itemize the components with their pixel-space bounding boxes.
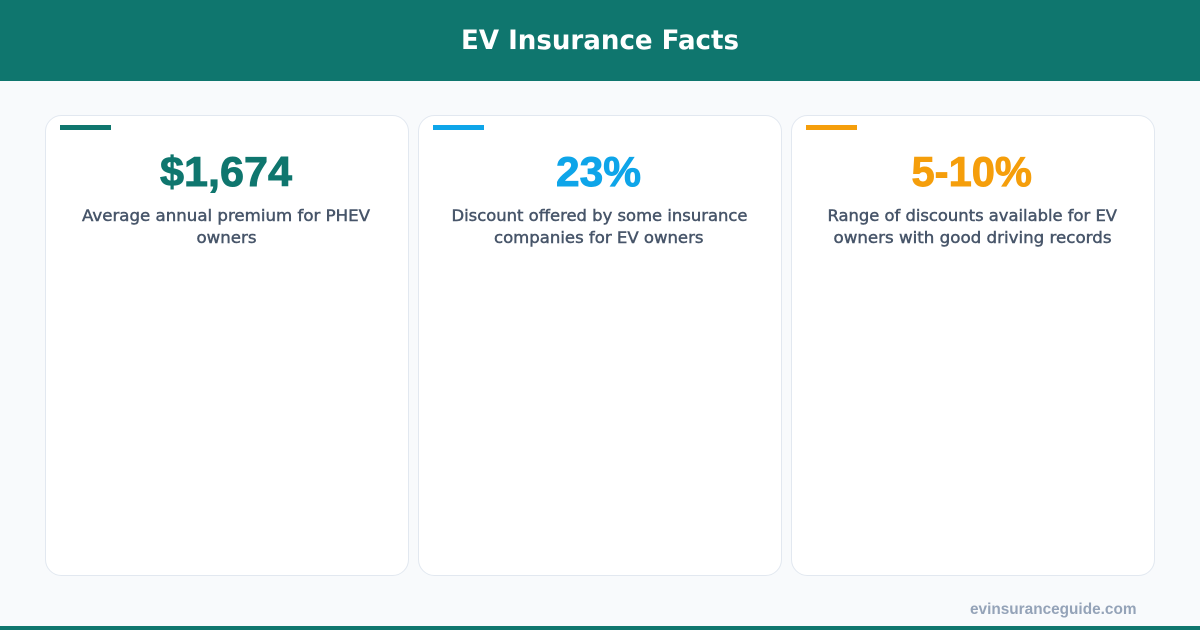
stat: 23%: 23%: [556, 148, 641, 195]
bottom bar: [0, 626, 1200, 630]
panel: good driver discounts: [792, 116, 1154, 576]
description: [828, 207, 1117, 247]
description: [452, 207, 748, 247]
panel: insurer discount: [418, 116, 782, 576]
description: owners: [196, 229, 256, 247]
footer source: evinsuranceguide.com: [970, 601, 1136, 618]
description: [82, 207, 370, 247]
description: Discount offered by some insurance: [452, 207, 748, 225]
header band: [0, 0, 1200, 81]
description: owners with good driving records: [834, 229, 1112, 247]
accent bar: [433, 125, 484, 130]
panel: PHEV premium: [46, 116, 408, 576]
stat: 5-10%: 5-10%: [912, 148, 1032, 195]
title: EV Insurance Facts: [461, 25, 739, 56]
description: Average annual premium for PHEV: [82, 207, 370, 225]
accent bar: [60, 125, 111, 130]
description: companies for EV owners: [494, 229, 704, 247]
accent bar: [806, 125, 857, 130]
stat: $1,674: $1,674: [160, 148, 293, 195]
description: Range of discounts available for EV: [828, 207, 1117, 225]
